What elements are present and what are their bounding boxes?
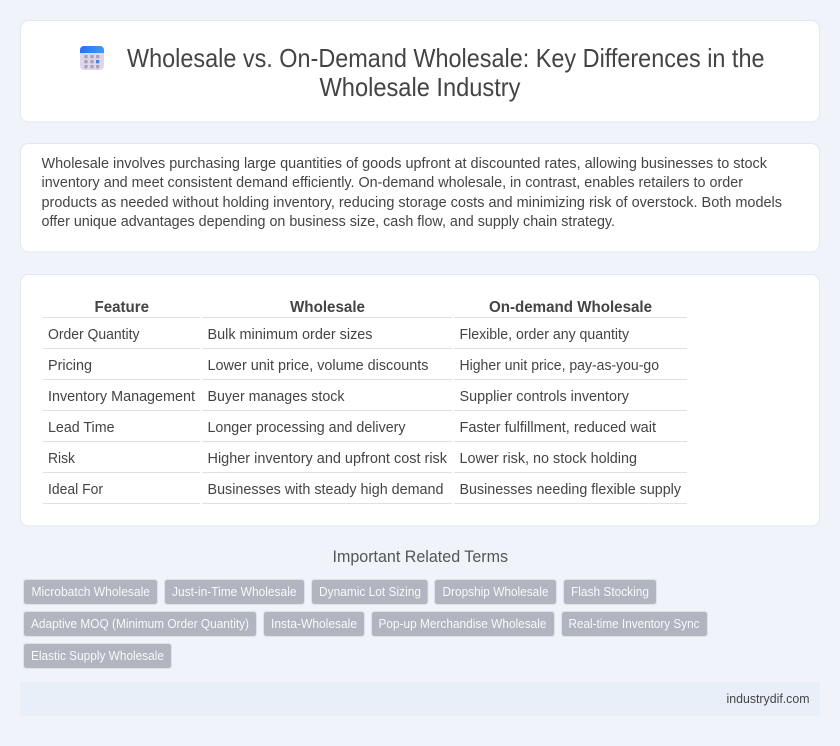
table header row: On-demand Wholesale: [489, 299, 652, 316]
tag: [24, 580, 158, 604]
row: pricing: Lower unit price, volume discounts: [208, 358, 428, 374]
tag: [562, 612, 708, 636]
panel: related term tags: [24, 580, 708, 668]
row: risk: Risk: [48, 451, 76, 467]
tag: Just-in-Time Wholesale: [172, 584, 296, 599]
row: lead time: Lead Time: [48, 420, 114, 436]
title: Wholesale Industry: [320, 72, 520, 102]
row: inventory management: [43, 389, 687, 411]
intro text: [42, 156, 782, 230]
row: pricing: [43, 358, 687, 380]
row: ideal for: Businesses with steady high demand: [208, 482, 444, 498]
row: lead time: Faster fulfillment, reduced wait: [460, 420, 656, 436]
row: inventory management: Inventory Management: [48, 389, 195, 405]
intro text: inventory and meet consistent demand efficiently. On-demand wholesale, in contrast, enables retailers to order: [42, 175, 743, 191]
footer: [20, 682, 820, 716]
tag: [24, 612, 256, 636]
row: order quantity: Order Quantity: [48, 327, 140, 343]
tag: Adaptive MOQ (Minimum Order Quantity): [31, 616, 249, 631]
table header row: [43, 299, 687, 318]
tag: [164, 580, 304, 604]
row: risk: [43, 451, 687, 473]
heading: related terms: Important Related Terms: [332, 548, 508, 566]
tag: [372, 612, 554, 636]
tag: [312, 580, 428, 604]
tag: [24, 644, 172, 668]
row: inventory management: Buyer manages stock: [208, 389, 345, 405]
tag: Insta-Wholesale: [271, 616, 357, 631]
intro text: products as needed without holding inventory, reducing storage costs and minimizing risk of overstock. Both models: [42, 195, 782, 211]
row: pricing: Pricing: [48, 358, 92, 374]
tag: Elastic Supply Wholesale: [31, 648, 164, 663]
tag: Real-time Inventory Sync: [568, 616, 700, 631]
panel: comparison table: [20, 274, 820, 526]
row: order quantity: Bulk minimum order sizes: [208, 327, 372, 343]
row: pricing: Higher unit price, pay-as-you-go: [460, 358, 659, 374]
row: ideal for: [43, 482, 687, 504]
title: [127, 43, 764, 102]
footer: industrydif.com: [726, 691, 810, 706]
tag: Dynamic Lot Sizing: [319, 584, 421, 599]
intro text: Wholesale involves purchasing large quantities of goods upfront at discounted rates, allowing businesses to stock: [42, 156, 768, 172]
tag: [434, 580, 556, 604]
tag: Pop-up Merchandise Wholesale: [378, 616, 546, 631]
row: ideal for: Businesses needing flexible supply: [460, 482, 682, 498]
row: lead time: [43, 420, 687, 442]
row: inventory management: Supplier controls inventory: [460, 389, 630, 405]
row: lead time: Longer processing and delivery: [208, 420, 406, 436]
icon: calendar: [80, 46, 104, 70]
row: order quantity: Flexible, order any quantity: [460, 327, 630, 343]
tag: Dropship Wholesale: [442, 584, 548, 599]
title: Wholesale vs. On-Demand Wholesale: Key Differences in the: [127, 43, 764, 73]
tag: Flash Stocking: [571, 584, 649, 599]
table header row: Feature: [94, 299, 149, 316]
table header row: Wholesale: [290, 299, 365, 316]
row: ideal for: Ideal For: [48, 482, 103, 498]
panel: introduction: [20, 144, 820, 252]
tag: Microbatch Wholesale: [32, 584, 150, 599]
row: order quantity: [43, 327, 687, 349]
tag: [264, 612, 364, 636]
intro text: offer unique advantages depending on business size, cash flow, and supply chain strategy.: [42, 214, 615, 230]
row: risk: Lower risk, no stock holding: [460, 451, 637, 467]
row: risk: Higher inventory and upfront cost risk: [208, 451, 448, 467]
tag: [564, 580, 656, 604]
panel: header: [20, 20, 820, 122]
